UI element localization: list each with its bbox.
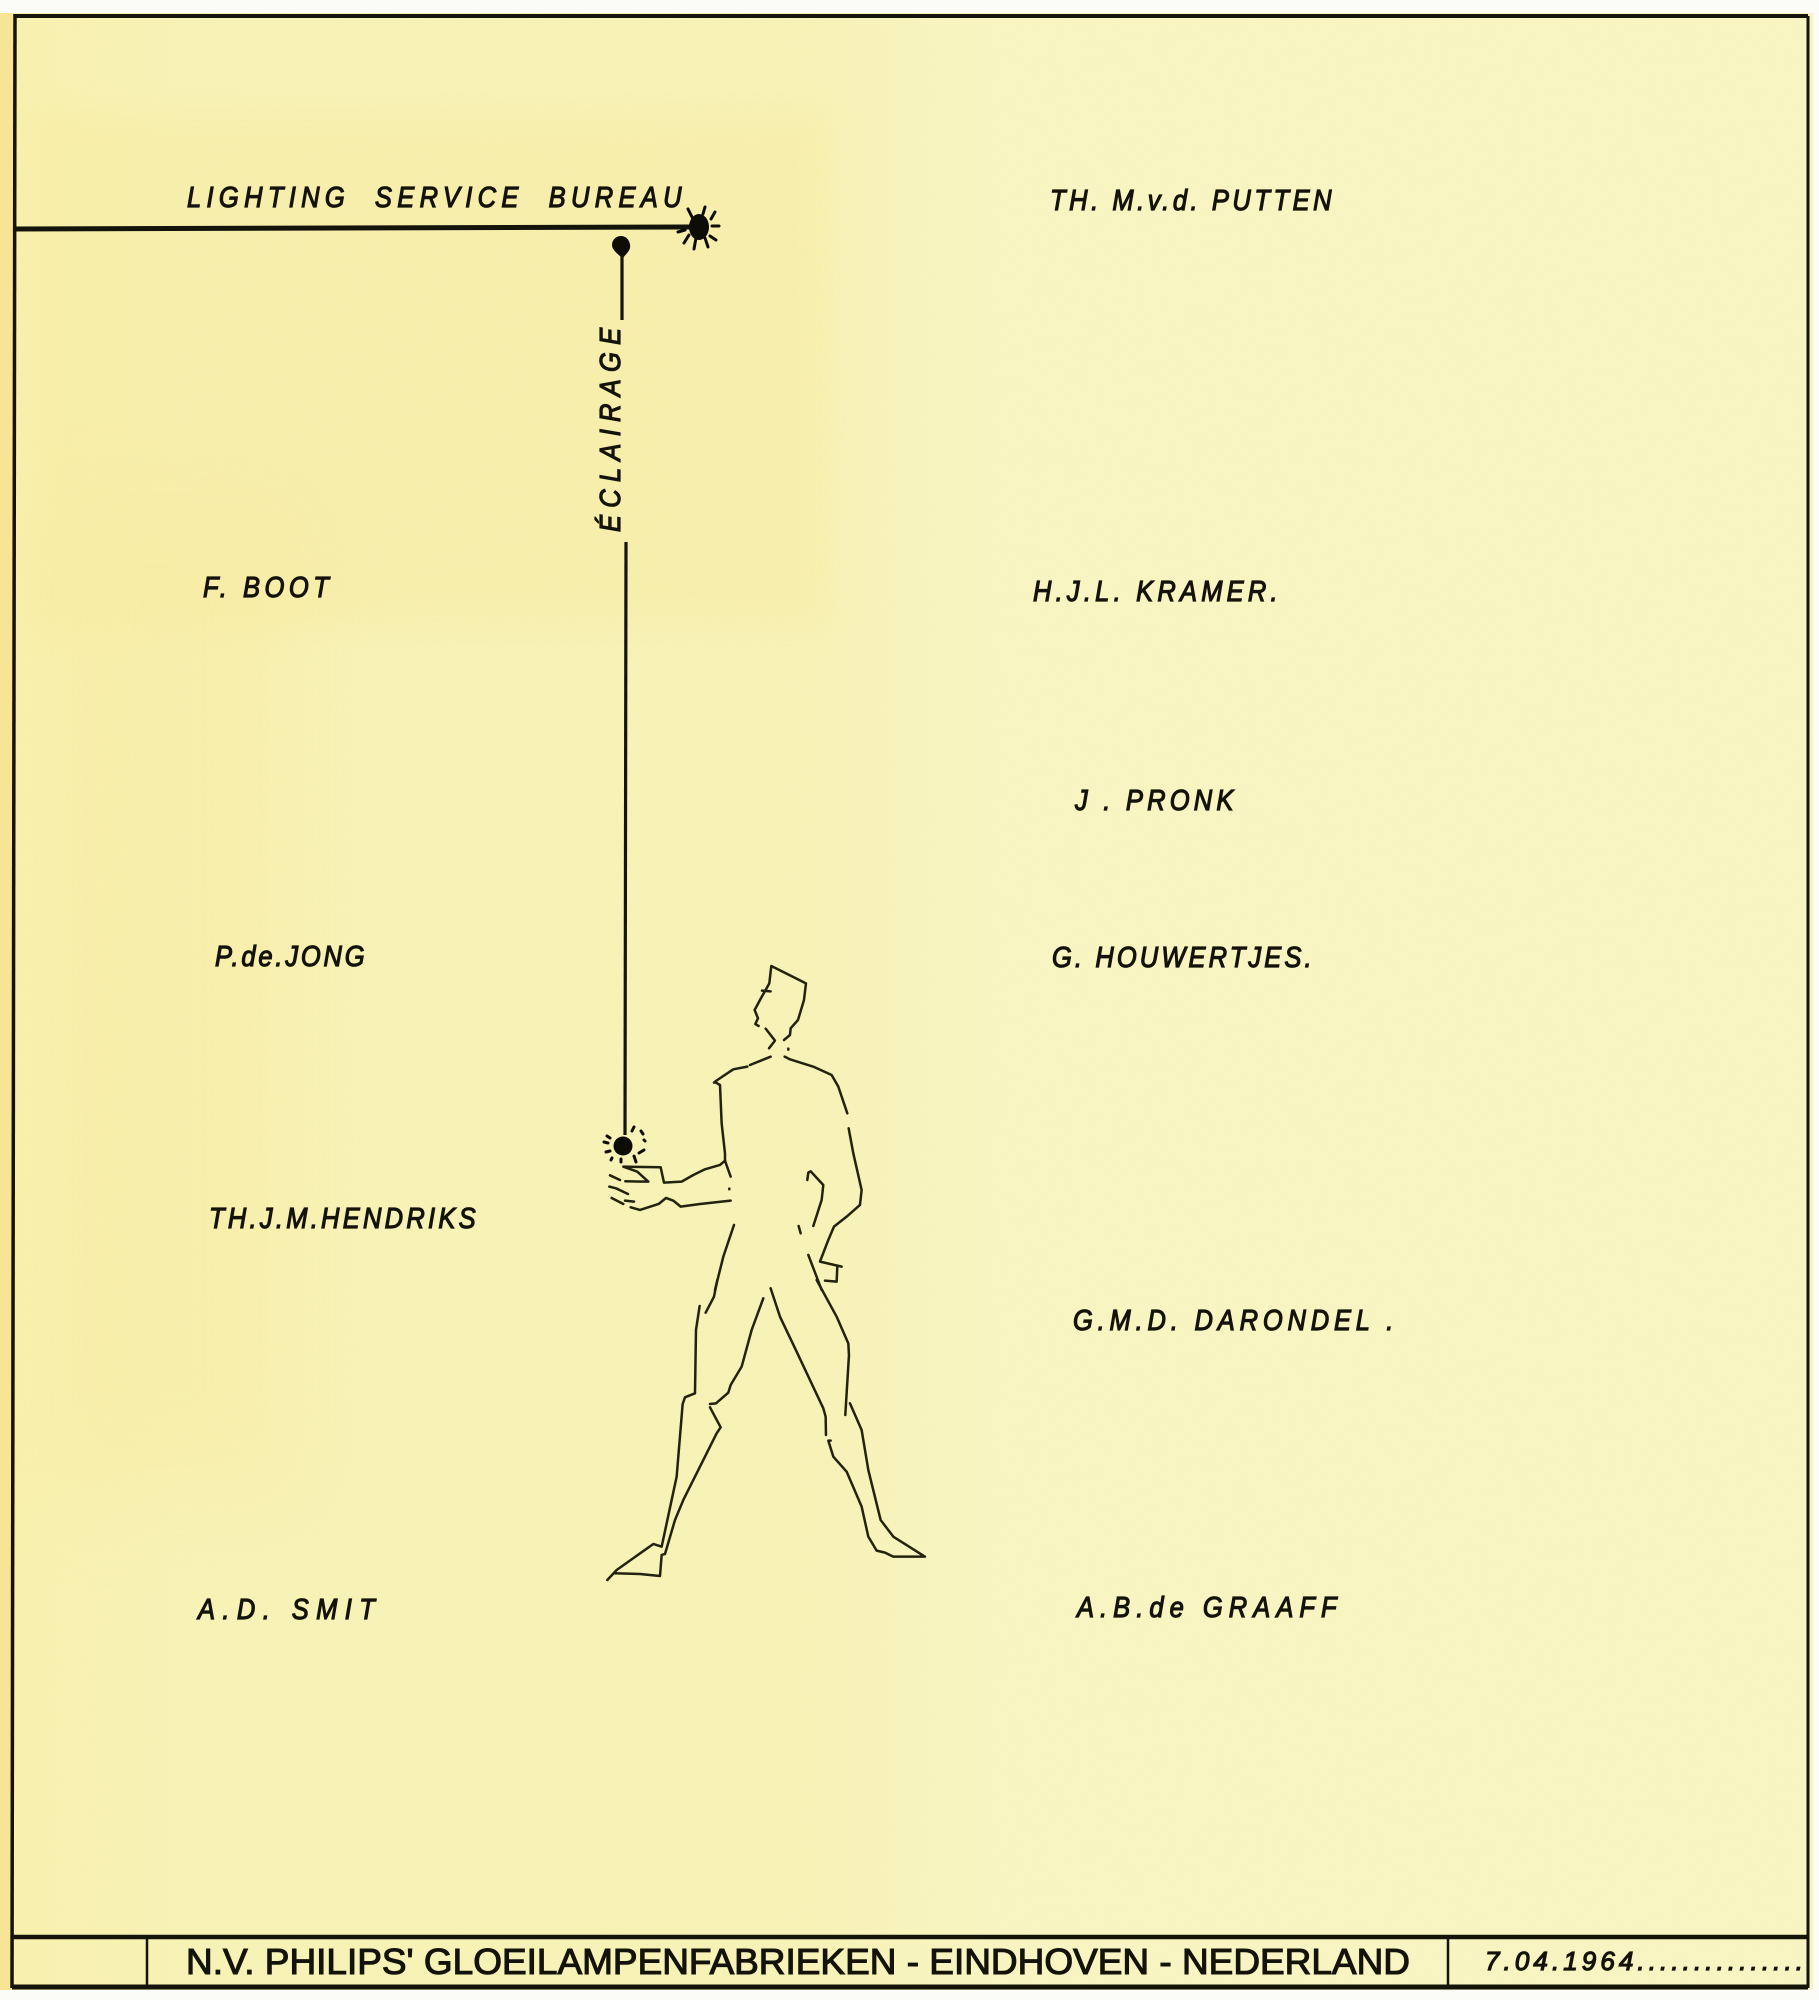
name: G. HOUWERTJES. xyxy=(1052,940,1312,973)
heading line from left edge to lamp xyxy=(15,227,690,229)
figure: man holding lamp xyxy=(607,966,925,1580)
name: A.B.de GRAAFF xyxy=(1075,1590,1338,1623)
name: F. BOOT xyxy=(203,570,331,603)
title block xyxy=(12,1937,1808,1987)
date: 7.04.1964............... xyxy=(1485,1946,1803,1976)
name: J . PRONK xyxy=(1074,783,1235,816)
icon: glowing lamp in hand xyxy=(604,1127,645,1162)
suspension cord lower xyxy=(625,542,626,1135)
upper body xyxy=(609,966,862,1290)
name: G.M.D. DARONDEL . xyxy=(1073,1303,1393,1336)
name: P.de.JONG xyxy=(215,939,365,972)
label: Eclairage: ÉCLAIRAGE xyxy=(593,327,626,532)
icon: lamp at end of line xyxy=(678,207,719,249)
name: H.J.L. KRAMER. xyxy=(1033,574,1278,607)
heading: Lighting Service Bureau: LIGHTING SERVICE BUREAU xyxy=(187,180,682,213)
name: TH. M.v.d. PUTTEN xyxy=(1050,183,1332,216)
company name: N.V. PHILIPS' GLOEILAMPENFABRIEKEN - EINDHOVEN - NEDERLAND xyxy=(186,1941,1410,1982)
names right column xyxy=(1033,183,1393,1623)
suspension cord: top dot xyxy=(612,236,630,258)
legs xyxy=(607,1280,925,1580)
names left column xyxy=(196,570,476,1625)
suspension cord upper xyxy=(620,255,624,320)
name: A.D. SMIT xyxy=(196,1592,377,1625)
name: TH.J.M.HENDRIKS xyxy=(209,1201,476,1234)
